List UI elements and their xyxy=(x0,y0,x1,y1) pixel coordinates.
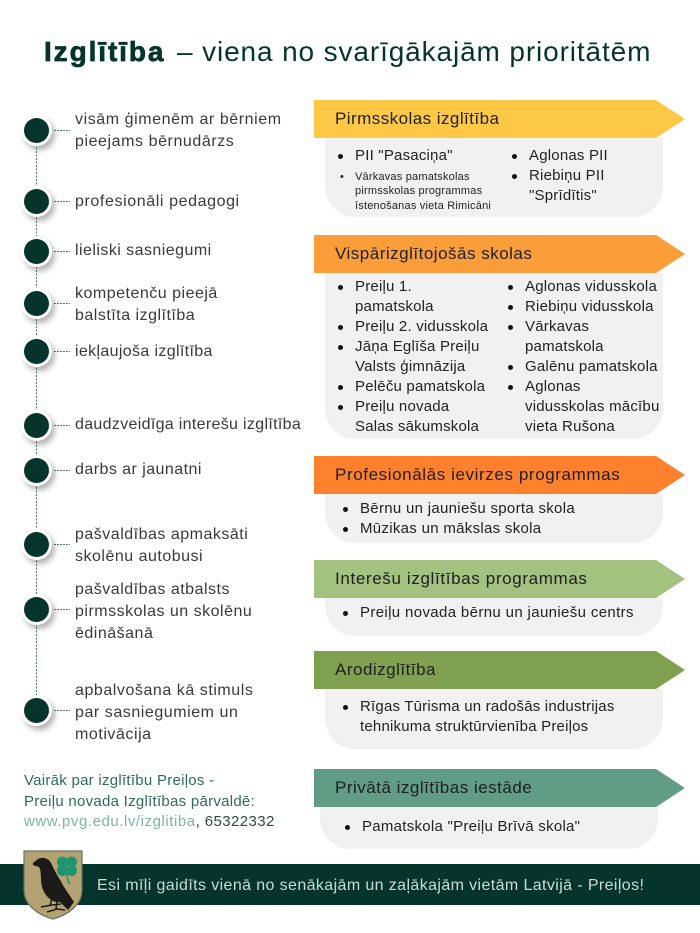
benefit: awards: par sasniegumiem un xyxy=(75,704,238,721)
benefit: buses xyxy=(75,526,248,565)
preschool list right: Riebiņu PII xyxy=(529,167,605,184)
panel: private xyxy=(314,769,685,849)
title: Izglītība – viena no svarīgākajām prioritātēm xyxy=(44,36,651,67)
benefit: awards xyxy=(75,682,253,743)
professional list background xyxy=(325,494,663,543)
benefit: kindergarten: pieejams bērnudārzs xyxy=(75,133,234,150)
professional heading: Profesionālās ievirzes programmas xyxy=(335,465,620,484)
general schools list right: Aglonas xyxy=(525,378,581,395)
private heading: Privātā izglītības iestāde xyxy=(335,778,532,797)
benefit: awards: motivācija xyxy=(75,726,152,743)
general schools list right: vieta Rušona xyxy=(525,418,615,435)
general schools list right: Vārkavas xyxy=(525,318,589,335)
general schools list left: Preiļu 1. xyxy=(355,278,412,295)
benefit: achievements: lieliski sasniegumi xyxy=(75,242,212,259)
vocational arrow xyxy=(314,651,685,689)
general schools list left xyxy=(338,278,488,435)
timeline connector xyxy=(36,130,70,711)
footer band xyxy=(0,864,700,905)
interest heading: Interešu izglītības programmas xyxy=(335,569,588,588)
general schools arrow xyxy=(314,235,685,273)
benefit: meals xyxy=(75,581,252,642)
private arrow xyxy=(314,769,685,807)
panel: interest programmes xyxy=(314,560,685,636)
general schools list left: Preiļu 2. vidusskola xyxy=(355,318,488,335)
general schools list left: Preiļu novada xyxy=(355,398,449,415)
panel: professional programmes xyxy=(314,456,685,543)
preschool list left: PII "Pasaciņa" xyxy=(355,147,453,164)
benefit: buses: pašvaldības apmaksāti xyxy=(75,526,248,543)
preschool list left xyxy=(338,147,491,212)
benefit: kindergarten: visām ģimenēm ar bērniem xyxy=(75,111,282,128)
interest list background xyxy=(325,598,663,636)
icon: coat of arms xyxy=(23,850,83,920)
vocational list: tehnikuma struktūrvienība Preiļos xyxy=(360,718,588,735)
general schools list right: vidusskolas mācību xyxy=(525,398,660,415)
benefit: kindergarten xyxy=(75,111,282,150)
benefit: meals: pirmsskolas un skolēnu xyxy=(75,603,252,620)
footer text: Esi mīļi gaidīts vienā no senākajām un zaļākajām vietām Latvijā - Preiļos! xyxy=(97,877,644,894)
preschool list right: Aglonas PII xyxy=(529,147,608,164)
private list: Pamatskola "Preiļu Brīvā skola" xyxy=(362,818,580,835)
professional list xyxy=(343,500,575,537)
text: īstenošanas vieta Rimicāni xyxy=(355,200,491,212)
panel: general schools xyxy=(314,235,685,439)
preschool arrow xyxy=(314,100,685,138)
benefit: competence: kompetenču pieejā xyxy=(75,285,218,302)
general schools list left: Valsts ģimnāzija xyxy=(355,358,465,375)
general schools list right: Aglonas vidusskola xyxy=(525,278,657,295)
general schools list right xyxy=(508,278,660,435)
preschool list background xyxy=(325,138,663,217)
benefit: youth: darbs ar jaunatni xyxy=(75,461,202,478)
vocational list xyxy=(343,698,615,735)
benefit: awards: apbalvošana kā stimuls xyxy=(75,682,253,699)
professional list: Bērnu un jauniešu sporta skola xyxy=(360,500,575,517)
interest arrow xyxy=(314,560,685,598)
contact information: Preiļu novada Izglītības pārvaldē: xyxy=(24,792,255,810)
benefit: competence: balstīta izglītība xyxy=(75,307,195,324)
general schools list left: Salas sākumskola xyxy=(355,418,479,435)
benefit: buses: skolēnu autobusi xyxy=(75,548,203,565)
benefit: meals: ēdināšanā xyxy=(75,625,153,642)
preschool heading: Pirmsskolas izglītība xyxy=(335,109,499,128)
professional list: Mūzikas un mākslas skola xyxy=(360,520,541,537)
preschool list right: "Sprīdītis" xyxy=(529,187,597,204)
timeline markers xyxy=(21,116,58,733)
general schools list right: pamatskola xyxy=(525,338,604,355)
vocational heading: Arodizglītība xyxy=(335,660,436,679)
general schools list left: Pelēču pamatskola xyxy=(355,378,485,395)
general schools list left: pamatskola xyxy=(355,298,434,315)
contact information: www.pvg.edu.lv/izglitiba, 65322332 xyxy=(24,813,275,830)
benefit: competence xyxy=(75,285,218,324)
benefit: inclusive: iekļaujoša izglītība xyxy=(75,343,213,360)
general schools list right: Galēnu pamatskola xyxy=(525,358,658,375)
general schools list background xyxy=(325,273,663,439)
contact information: Vairāk par izglītību Preiļos - xyxy=(24,772,214,789)
text: Vārkavas pamatskolas xyxy=(355,171,470,183)
panel: vocational xyxy=(314,651,685,749)
contact information xyxy=(24,772,275,830)
general schools heading: Vispārizglītojošās skolas xyxy=(335,244,532,263)
benefit: interests: daudzveidīga interešu izglītība xyxy=(75,416,301,433)
text: • xyxy=(340,171,344,183)
benefit: meals: pašvaldības atbalsts xyxy=(75,581,230,598)
vocational list: Rīgas Tūrisma un radošās industrijas xyxy=(360,698,615,715)
benefit: teachers: profesionāli pedagogi xyxy=(75,193,240,210)
general schools list right: Riebiņu vidusskola xyxy=(525,298,654,315)
vocational list background xyxy=(325,689,663,749)
interest list: Preiļu novada bērnu un jauniešu centrs xyxy=(360,604,634,621)
panel: preschool xyxy=(314,100,685,217)
preschool list right xyxy=(512,147,608,204)
text: pirmsskolas programmas xyxy=(355,185,482,197)
professional arrow xyxy=(314,456,685,494)
general schools list left: Jāņa Eglīša Preiļu xyxy=(355,338,480,355)
private list background xyxy=(320,807,658,849)
